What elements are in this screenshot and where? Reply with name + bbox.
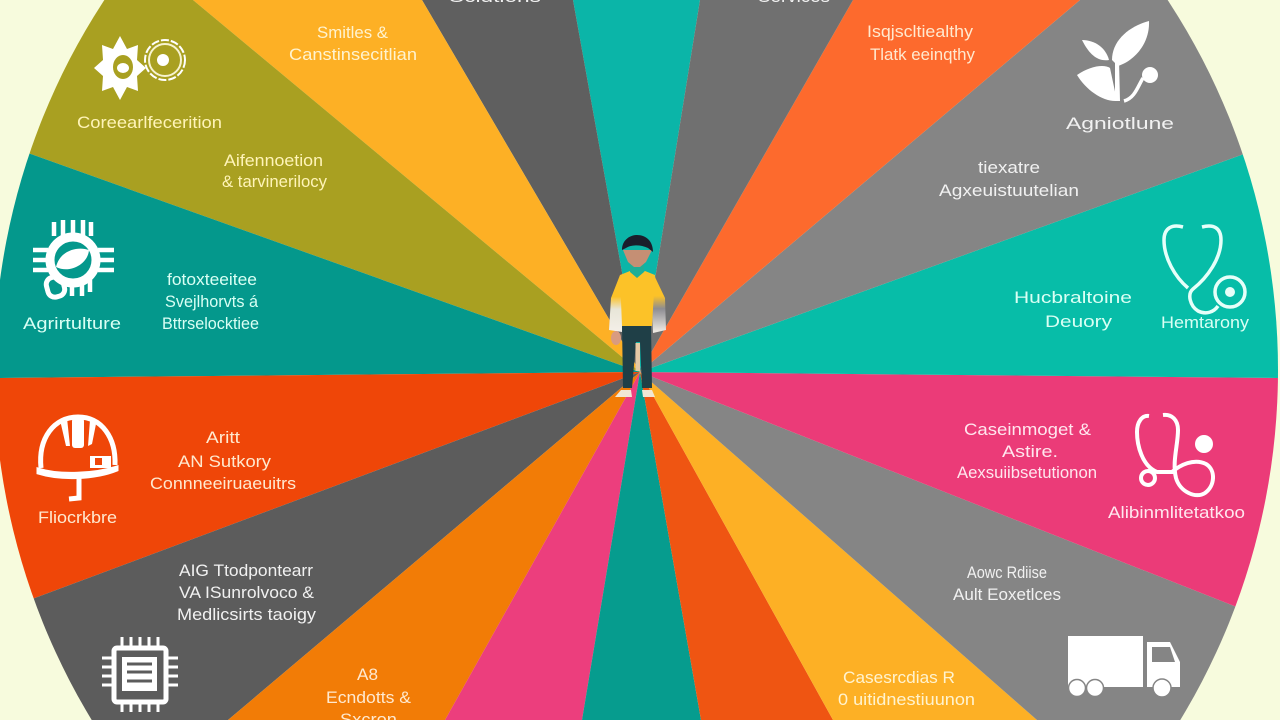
sector text <box>953 566 1060 600</box>
icon label: Agniotlune <box>1066 114 1174 133</box>
trousers <box>622 324 652 388</box>
sector text <box>867 22 975 64</box>
sector text: Agxeuistuutelian <box>939 181 1079 200</box>
sector text <box>1016 291 1131 330</box>
sector text: Astire. <box>1002 442 1058 461</box>
icon: gears <box>94 36 185 100</box>
sector text: Aexsuiibsetutionon <box>957 463 1097 482</box>
sector text: Casesrcdias R <box>843 668 955 687</box>
panel: right teal sector <box>640 141 1280 378</box>
sector text: tiexatre <box>978 158 1040 177</box>
panel: top right grey sector <box>640 0 853 372</box>
face <box>623 250 652 267</box>
panel: orange top right sector <box>640 0 1080 372</box>
left shoe <box>615 390 632 397</box>
panel: upper right grey sector <box>640 0 1280 372</box>
sector text: A8 <box>357 665 378 684</box>
panel: lower right grey sector <box>640 372 1280 720</box>
icon label: Alibinmlitetatkoo <box>1108 503 1245 522</box>
sector text: Aritt <box>206 428 240 447</box>
panel: left teal sector <box>0 143 640 378</box>
sector text: Isqjscltiealthy <box>867 22 974 41</box>
sector text <box>957 423 1096 478</box>
person figure at the centre <box>609 235 666 397</box>
panel: right pink sector <box>640 372 1280 624</box>
icon: microchip <box>102 637 178 712</box>
sector text: AIG Ttodpontearr <box>179 561 313 580</box>
right sleeve <box>651 275 666 333</box>
sector text: Caseinmoget & <box>964 420 1092 439</box>
sector text <box>177 561 317 624</box>
sector text <box>222 151 327 191</box>
icon label: Hemtarony <box>1161 313 1250 332</box>
panel: bottom red sector <box>640 372 833 720</box>
sector text: AN Sutkory <box>178 452 272 471</box>
sector text: Svejlhorvts á <box>165 292 259 311</box>
sector text: Ecndotts & <box>326 688 412 707</box>
icon label: Fliocrkbre <box>38 508 117 527</box>
sector text <box>163 273 258 329</box>
sector text: Tlatk eeinqthy <box>870 45 975 64</box>
sector text: Medlicsirts taoigy <box>177 605 317 624</box>
sector text: Canstinsecitlian <box>289 45 417 64</box>
panel: yellow sector <box>193 0 640 372</box>
sector text <box>326 665 412 720</box>
sector text: Connneeiruaeuitrs <box>150 474 296 493</box>
icon: stethoscope <box>1164 226 1245 313</box>
icon: plant <box>1077 21 1158 101</box>
icon: delivery truck <box>1068 636 1180 697</box>
sector text: Hucbraltoine <box>1014 288 1132 307</box>
icon: hard hat <box>38 417 117 499</box>
panel: bottom teal sector <box>582 372 701 720</box>
panel: top teal sector <box>573 0 700 372</box>
sector text <box>150 431 296 489</box>
icon label: Coreearlfecerition <box>77 113 222 132</box>
sector text: Aifennoetion <box>224 151 323 170</box>
left sleeve <box>609 275 623 332</box>
hand <box>611 331 621 345</box>
icon: chip sun with leaf <box>33 220 114 299</box>
panel: bottom pink sector <box>445 372 640 720</box>
shirt <box>620 271 655 326</box>
sector text: & tarvinerilocy <box>222 172 327 191</box>
neck <box>630 264 644 278</box>
sector text <box>290 26 416 60</box>
sector text: Deuory <box>1045 312 1113 331</box>
sector text: 0 uitidnestiuunon <box>838 690 975 709</box>
panel: bottom yellow sector <box>640 372 1037 720</box>
sector text: Ault Eoxetlces <box>953 585 1061 604</box>
sector text: fotoxteeitee <box>167 270 257 289</box>
sector text: Bttrselocktiee <box>162 314 259 333</box>
icon label: Agrirtulture <box>23 314 121 333</box>
right shoe <box>642 390 655 397</box>
sector text: VA ISunrolvoco & <box>179 583 315 602</box>
sector text <box>838 671 974 705</box>
hair <box>622 235 653 252</box>
sector text <box>939 158 1079 200</box>
gap between legs <box>636 343 640 371</box>
panel: dark grey sector <box>0 372 640 720</box>
panel: orange sector <box>228 372 640 720</box>
sector text: Aowc Rdiise <box>967 563 1047 582</box>
panel: olive sector <box>0 0 640 372</box>
sector text: Smitles & <box>317 23 389 42</box>
panel: left red sector <box>0 372 640 611</box>
icon: stethoscope <box>1137 415 1213 495</box>
panel: top left grey sector <box>422 0 640 372</box>
